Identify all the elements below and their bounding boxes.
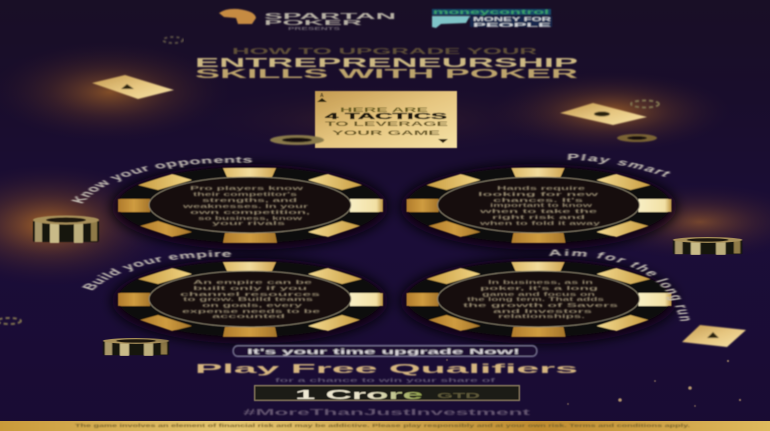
icon: small chip top <box>163 37 183 43</box>
logo: Spartan Poker <box>219 9 397 31</box>
text: chip body: right risk and <box>492 215 585 221</box>
card: 4 tactics: A <box>320 93 324 99</box>
logo: moneycontrol <box>432 9 552 29</box>
text: chip body: poker, it's a long <box>480 286 598 292</box>
text: chip body <box>477 186 600 227</box>
card: 4 tactics: TO LEVERAGE <box>325 122 448 128</box>
text: chip body: your rivals <box>212 221 285 227</box>
text: chip body: when to take the <box>477 209 597 215</box>
icon: helmet <box>219 9 256 24</box>
panel: know your opponents <box>70 156 392 255</box>
icon: floating card left <box>92 75 174 99</box>
heading: know your opponents: Know your opponents <box>70 156 254 204</box>
panel: play smart <box>396 153 682 255</box>
text: chip body: game and focus on <box>482 292 595 298</box>
hashtag: #MoreThanJustInvestment <box>243 407 530 417</box>
text: chip body: important to know <box>490 203 594 209</box>
icon: speech tag <box>432 16 470 28</box>
text: chip body: An empire can be <box>193 280 312 286</box>
text: chip body: on goals, every <box>202 303 302 309</box>
text: chip body <box>463 280 618 320</box>
text: chip body <box>180 280 320 320</box>
card: 4 tactics: 4 TACTICS <box>325 112 449 121</box>
text: chip body: their competitor's <box>193 192 297 198</box>
text: chip body: accounted <box>212 314 285 320</box>
logo: Spartan Poker: POKER <box>264 20 362 27</box>
text: chip body: the growth of Savers <box>463 303 618 309</box>
text: chip body: channel resources <box>180 292 320 298</box>
text: subheading: for a chance to win your share of <box>275 378 496 384</box>
prize box: GTD <box>437 393 480 400</box>
logo: moneycontrol: moneycontrol <box>433 9 550 16</box>
text: chip body: to grow. Build teams <box>183 297 313 303</box>
text: chip body: Hands require <box>497 186 585 192</box>
prize box <box>254 386 520 402</box>
text: chip body: expense needs to be <box>182 309 320 315</box>
icon: small chip under card <box>270 135 324 145</box>
icon: floating card right <box>560 103 647 125</box>
heading: play free qualifiers: Play Free Qualifiers <box>195 361 578 376</box>
panel: aim for the long run <box>396 248 691 350</box>
text: chip body: the long term. That adds <box>467 297 604 303</box>
title: SKILLS WITH POKER <box>195 67 578 81</box>
icon: small chip top right <box>631 100 659 108</box>
card: 4 tactics: HERE ARE <box>340 108 428 114</box>
text: chip body: own competition, <box>190 210 311 216</box>
panel: build your empire <box>81 250 393 350</box>
card: 4 tactics <box>315 91 457 148</box>
text: chip body: built only if you <box>193 286 307 292</box>
icon: small chip far left <box>0 318 21 324</box>
text: chip body <box>181 186 311 227</box>
text: chip body: when to fold it away <box>478 221 600 227</box>
text: chip body: In business, as in <box>488 280 593 286</box>
text: chip body: so business, know <box>198 216 304 222</box>
footer disclaimer bar <box>0 421 770 431</box>
footer disclaimer bar: The game involves an element of financial risk and may be addictive. Please play responsibly and at your own risk. Terms and conditions apply. <box>75 423 690 428</box>
title <box>195 47 578 81</box>
logo: Spartan Poker: SPARTAN <box>264 12 397 21</box>
icon: floating card bottom right <box>682 325 746 347</box>
icon: chip stack right <box>673 237 742 255</box>
heading: build your empire: Build your empire <box>81 250 232 291</box>
text: chip body: weaknesses. In your <box>181 204 310 210</box>
callout: upgrade now <box>233 346 537 356</box>
text: chip body: Pro players know <box>190 186 305 192</box>
text: chip body: looking for new <box>478 192 600 198</box>
card: 4 tactics: YOUR GAME <box>332 131 440 137</box>
prize box: 1 Crore <box>295 387 423 402</box>
text: chip body: and Investors <box>493 309 592 315</box>
logo: moneycontrol: MONEY FOR <box>473 17 551 23</box>
text: chip body: chances. It's <box>493 198 583 204</box>
title: HOW TO UPGRADE YOUR <box>232 47 538 56</box>
icon: small chip right <box>617 134 657 142</box>
icon: chip stack bottom left <box>103 338 169 356</box>
logo: Spartan Poker: PRESENTS <box>288 26 340 31</box>
icon: chip stack left <box>33 216 99 243</box>
heading: aim for the long run: Aim for the long run <box>548 248 691 322</box>
title: ENTREPRENEURSHIP <box>195 56 578 70</box>
logo: moneycontrol: PEOPLE <box>473 23 552 29</box>
callout: upgrade now: It's your time upgrade Now! <box>247 347 520 356</box>
heading: play smart: Play smart <box>566 153 672 178</box>
heading: play free qualifiers <box>195 361 578 384</box>
text: chip body: relationships. <box>498 314 586 320</box>
text: chip body: strengths, and <box>202 198 297 204</box>
icon: sparkles <box>446 359 741 407</box>
